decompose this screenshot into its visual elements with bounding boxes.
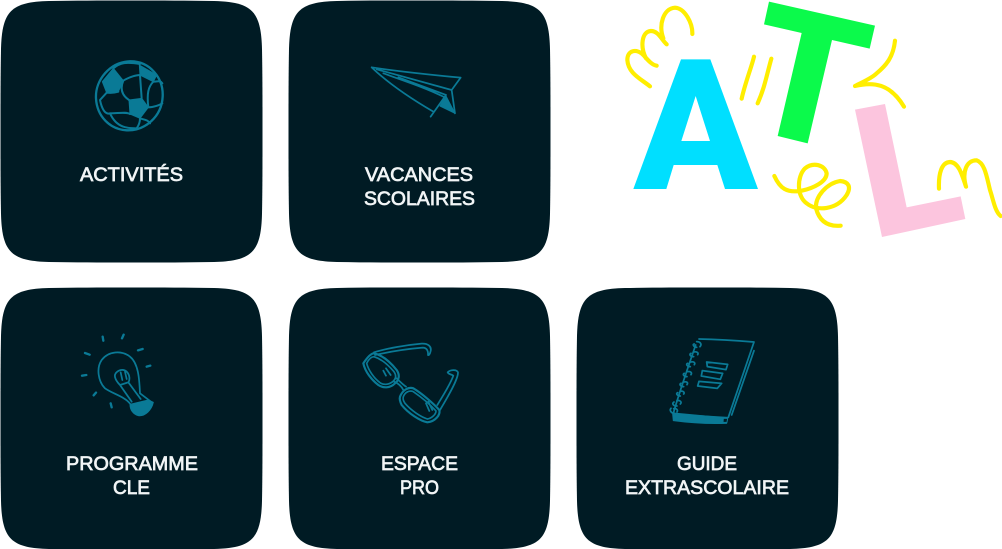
label: programme cle xyxy=(66,453,198,499)
squiggle: top left arches xyxy=(627,8,692,86)
panel: espace pro xyxy=(288,288,550,549)
icon: paper plane xyxy=(372,67,461,117)
label: guide extrascolaire xyxy=(625,453,789,499)
card background xyxy=(0,0,262,262)
panel: activités xyxy=(0,0,262,262)
panel: vacances scolaires xyxy=(288,0,550,262)
letter A xyxy=(633,59,758,189)
label: espace pro: PRO xyxy=(400,477,439,499)
icon: light bulb xyxy=(82,335,153,416)
label: activités: ACTIVITÉS xyxy=(80,163,183,186)
card background xyxy=(288,0,550,262)
panel: programme cle xyxy=(0,288,262,549)
label: espace pro xyxy=(381,453,458,499)
label: guide extrascolaire: EXTRASCOLAIRE xyxy=(625,477,789,499)
label: programme cle: PROGRAMME xyxy=(66,453,198,475)
squiggle: bottom loops xyxy=(774,165,849,226)
icon: glasses xyxy=(363,344,458,422)
card background xyxy=(576,288,838,549)
panel: guide extrascolaire xyxy=(576,288,838,549)
letter L xyxy=(855,104,965,237)
squiggle: bottom right arches xyxy=(939,160,1001,216)
label: guide extrascolaire: GUIDE xyxy=(677,453,737,475)
label: programme cle: CLE xyxy=(113,477,150,499)
squiggle: double dash xyxy=(742,57,771,103)
letter T xyxy=(764,2,875,143)
icon: spiral notebook xyxy=(670,339,754,423)
card background xyxy=(288,288,550,549)
logo: ATL letters and squiggles xyxy=(627,2,1001,237)
icon: soccer ball xyxy=(96,61,163,130)
label: vacances scolaires xyxy=(364,164,475,210)
label: espace pro: ESPACE xyxy=(381,453,458,475)
card background xyxy=(0,288,262,549)
label: vacances scolaires: SCOLAIRES xyxy=(364,188,475,210)
squiggle: right arrow xyxy=(855,41,904,107)
label: vacances scolaires: VACANCES xyxy=(365,164,473,186)
